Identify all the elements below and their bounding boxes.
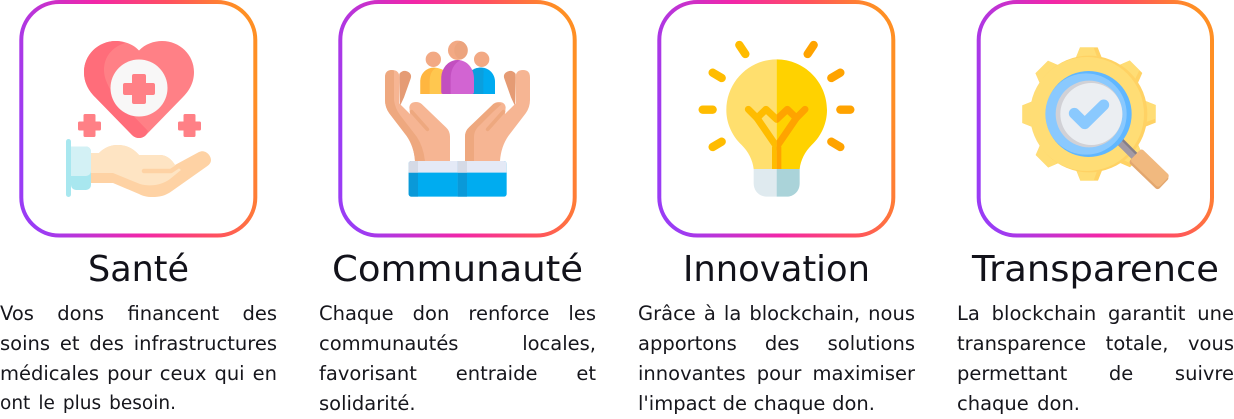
card with icon: Santé (19, 0, 258, 238)
text block: Santé description: soins et des infrastructures (0, 332, 277, 355)
text block: Transparence description: La blockchain garantit une (957, 302, 1234, 325)
text block: Innovation description: innovantes pour maximiser (638, 362, 915, 385)
text block: Innovation description: Grâce à la blockchain, nous (638, 302, 915, 325)
text block: Communauté description: favorisant entraide et (319, 362, 596, 385)
icon: two hands holding a group of people (385, 41, 530, 197)
panel: Innovation (638, 0, 915, 415)
icon: light bulb with rays (703, 45, 850, 197)
card with icon: Transparence (976, 0, 1214, 238)
panel: Communauté (319, 0, 596, 415)
text block: Transparence description (957, 302, 1234, 415)
icon: heart with medical cross over open hand (66, 41, 211, 197)
heading: Transparence: Transparence (971, 249, 1219, 290)
card with icon: Innovation (657, 0, 896, 238)
text block: Communauté description (319, 302, 596, 415)
heading: Innovation: Innovation (683, 249, 870, 290)
text block: Innovation description (638, 302, 915, 415)
card frame (21, 2, 255, 236)
card frame (979, 2, 1212, 236)
text block: Communauté description: Chaque don renforce les (319, 302, 596, 325)
right cuff (458, 161, 507, 197)
text block: Transparence description: transparence totale, vous (957, 332, 1234, 355)
card frame (659, 2, 893, 236)
text block: Communauté description: solidarité. (319, 392, 416, 415)
panel: Santé (0, 0, 277, 414)
text block: Communauté description: communautés locales, (319, 332, 596, 355)
left cuff (409, 161, 458, 197)
icon: gear with magnifying glass and check mark (1022, 47, 1170, 190)
text block: Transparence description: permettant de suivre (957, 362, 1234, 385)
left hand (385, 70, 450, 161)
text block: Santé description (0, 302, 277, 414)
text block: Santé description: ont le plus besoin. (0, 393, 176, 414)
heading: Communauté: Communauté (332, 249, 583, 290)
panel: Transparence (957, 0, 1234, 415)
card frame (340, 2, 575, 236)
text block: Transparence description: chaque don. (957, 392, 1080, 415)
right hand (465, 70, 530, 161)
text block: Santé description: Vos dons financent des (0, 302, 277, 325)
text block: Santé description: médicales pour ceux qui en (0, 362, 277, 385)
text block: Innovation description: l'impact de chaque don. (638, 392, 875, 415)
text block: Innovation description: apportons des solutions (638, 332, 915, 355)
card with icon: Communauté (338, 0, 577, 238)
heading: Santé: Santé (88, 249, 189, 290)
